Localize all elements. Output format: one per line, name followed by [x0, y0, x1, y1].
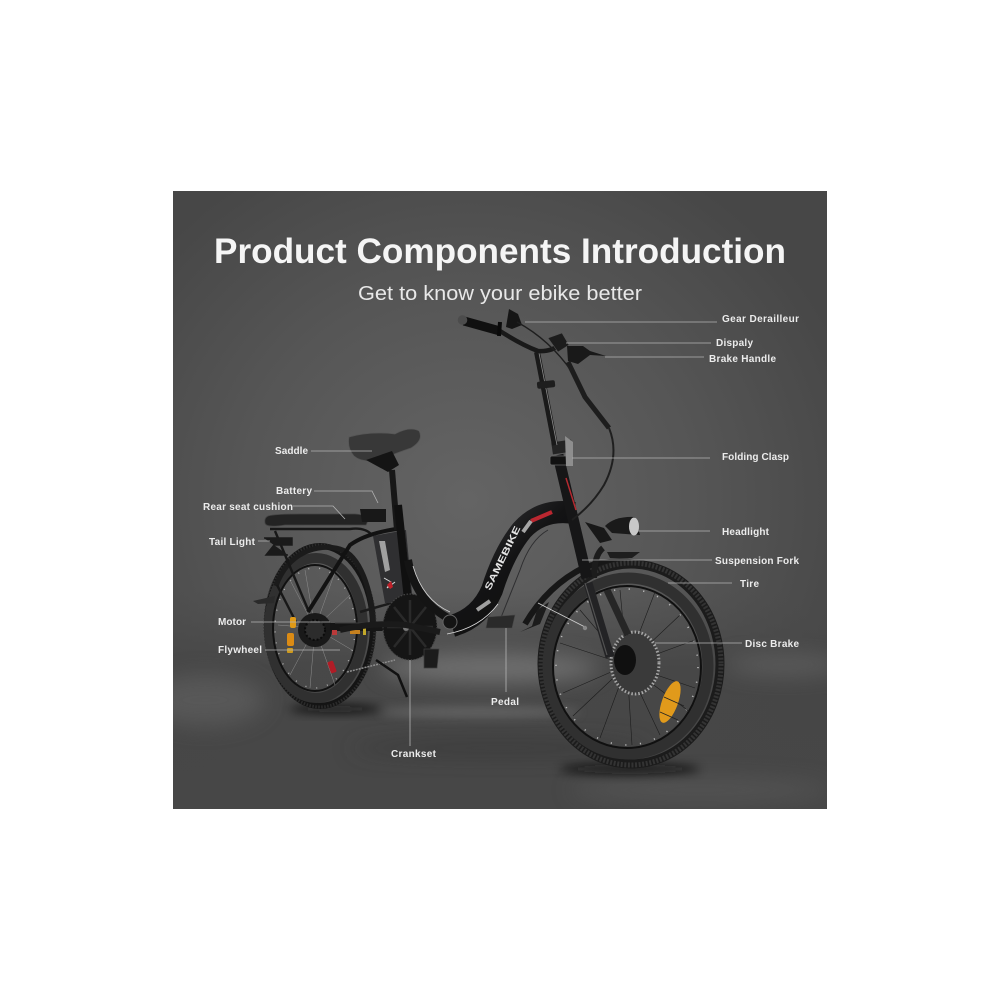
disc brake: [611, 632, 659, 694]
rear cog and chain stay: [298, 602, 408, 672]
orange derailleur parts: [287, 617, 337, 674]
brake cable: [572, 428, 613, 520]
upper stem: [537, 352, 557, 445]
label: Motor: Motor: [218, 617, 246, 628]
label: Brake Handle: Brake Handle: [709, 354, 776, 365]
seat post: [392, 470, 397, 530]
tail light: [264, 538, 292, 555]
rear rack: [270, 529, 372, 622]
down tube: [408, 560, 448, 618]
label: Headlight: Headlight: [722, 527, 770, 538]
label: Tail Light: Tail Light: [209, 537, 256, 548]
crankset: [340, 594, 440, 660]
label: Dispaly: Dispaly: [716, 338, 753, 349]
front fender: [525, 561, 660, 624]
callout lines: [251, 322, 742, 746]
frame lettering: SAMEBIKE: [483, 525, 523, 592]
illustration: folding e-bike: [253, 309, 721, 765]
label: Battery: Battery: [276, 486, 312, 497]
fender stay: [538, 603, 585, 627]
seat stay: [308, 528, 404, 612]
seat tube: [398, 505, 408, 600]
head tube highlight: [566, 478, 576, 510]
main curved frame: [443, 512, 574, 634]
rear seat cushion: [265, 514, 368, 526]
front fender flap: [520, 602, 549, 632]
head tube and lower stem: [558, 455, 587, 578]
label: Disc Brake: Disc Brake: [745, 639, 799, 650]
label: Pedal: Pedal: [491, 697, 519, 708]
panel: dark studio background: [145, 191, 845, 809]
title: Product Components Introduction: [214, 232, 786, 271]
reflector: [655, 679, 685, 725]
label: Rear seat cushion: Rear seat cushion: [203, 502, 293, 513]
folding clasp: [550, 436, 573, 466]
brake handle: [567, 346, 606, 364]
label: Crankset: Crankset: [391, 749, 437, 760]
subtitle: Get to know your ebike better: [358, 283, 642, 305]
right pedal: [486, 615, 515, 628]
battery: [360, 509, 413, 603]
saddle: [349, 429, 420, 461]
label: Folding Clasp: Folding Clasp: [722, 452, 789, 463]
left pedal: [424, 649, 439, 668]
kickstand: [376, 660, 407, 697]
label: Flywheel: Flywheel: [218, 645, 262, 656]
brake cable sleeve: [568, 362, 609, 428]
rear fender flap: [253, 596, 275, 604]
label: Tire: Tire: [740, 579, 759, 590]
label: Suspension Fork: Suspension Fork: [715, 556, 799, 567]
label: Gear Derailleur: Gear Derailleur: [722, 314, 799, 325]
label: Saddle: Saddle: [275, 446, 308, 457]
handlebar: [458, 309, 572, 372]
headlight: [585, 517, 640, 543]
saddle clamp: [366, 451, 399, 472]
fork legs: [585, 548, 640, 657]
rear wheel: [265, 545, 375, 707]
rear fender: [276, 547, 373, 625]
display unit: [548, 333, 569, 352]
front wheel: [541, 563, 721, 765]
